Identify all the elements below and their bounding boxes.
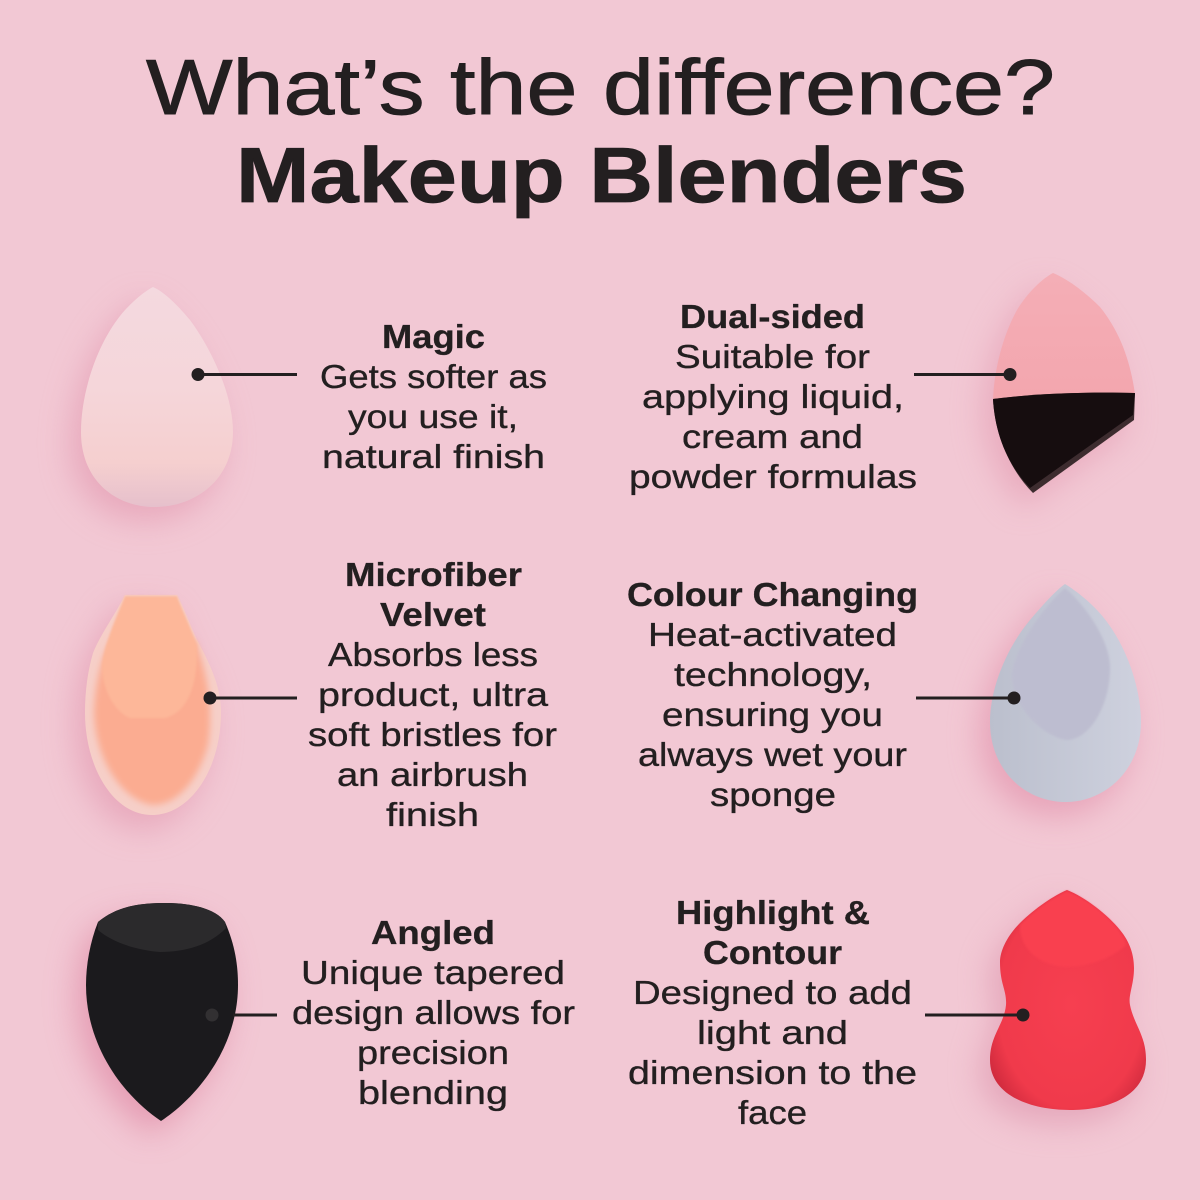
text: colour changing: technology,: [674, 656, 872, 693]
text: angled: [292, 914, 575, 1111]
text: dual-sided: [629, 298, 917, 495]
text: angled: Unique tapered: [301, 954, 565, 991]
blender: magic: [71, 287, 233, 521]
text: colour changing: Heat-activated: [648, 616, 897, 653]
callout: magic: [192, 368, 297, 381]
text: magic: natural finish: [322, 438, 545, 475]
text: colour changing: always wet your: [638, 736, 907, 773]
callout: colour changing: [916, 692, 1020, 704]
text: microfiber velvet: [308, 556, 557, 833]
text: angled: design allows for: [292, 994, 575, 1031]
text: highlight and contour: Designed to add: [633, 974, 912, 1011]
text: highlight and contour: Contour: [703, 934, 842, 971]
text: dual-sided: cream and: [682, 418, 863, 455]
text: magic: you use it,: [348, 398, 518, 435]
text: magic: [320, 318, 547, 475]
text: microfiber velvet: an airbrush: [337, 756, 528, 793]
text: colour changing: Colour Changing: [627, 576, 918, 613]
blender: highlight and contour: [980, 890, 1146, 1124]
text: magic: Gets softer as: [320, 358, 547, 395]
callout: dual-sided: [914, 368, 1016, 381]
text: highlight and contour: light and: [697, 1014, 848, 1051]
text: dual-sided: Suitable for: [675, 338, 870, 375]
blender: angled: [76, 903, 238, 1135]
text: highlight and contour: [628, 894, 917, 1131]
title: [146, 43, 1055, 219]
title: Makeup Blenders: [236, 131, 967, 219]
blender: microfiber velvet: [75, 595, 221, 829]
text: dual-sided: Dual-sided: [680, 298, 865, 335]
text: dual-sided: applying liquid,: [642, 378, 904, 415]
text: microfiber velvet: soft bristles for: [308, 716, 557, 753]
text: microfiber velvet: Absorbs less: [328, 636, 538, 673]
title: What’s the difference?: [146, 43, 1055, 131]
text: microfiber velvet: product, ultra: [318, 676, 549, 713]
text: microfiber velvet: finish: [386, 796, 479, 833]
text: colour changing: sponge: [710, 776, 836, 813]
text: dual-sided: powder formulas: [629, 458, 917, 495]
text: highlight and contour: dimension to the: [628, 1054, 917, 1091]
text: colour changing: ensuring you: [662, 696, 883, 733]
text: angled: precision: [357, 1034, 509, 1071]
text: microfiber velvet: Velvet: [380, 596, 486, 633]
text: microfiber velvet: Microfiber: [345, 556, 522, 593]
text: colour changing: [627, 576, 918, 813]
blender: colour changing: [980, 584, 1141, 816]
text: magic: Magic: [382, 318, 485, 355]
text: highlight and contour: face: [738, 1094, 807, 1131]
text: angled: Angled: [371, 914, 495, 951]
blender: dual-sided: [983, 273, 1135, 507]
text: highlight and contour: Highlight &: [676, 894, 870, 931]
callout: angled: [206, 1008, 277, 1022]
callout: microfiber velvet: [204, 692, 297, 704]
callout: highlight and contour: [925, 1008, 1030, 1022]
text: angled: blending: [358, 1074, 508, 1111]
